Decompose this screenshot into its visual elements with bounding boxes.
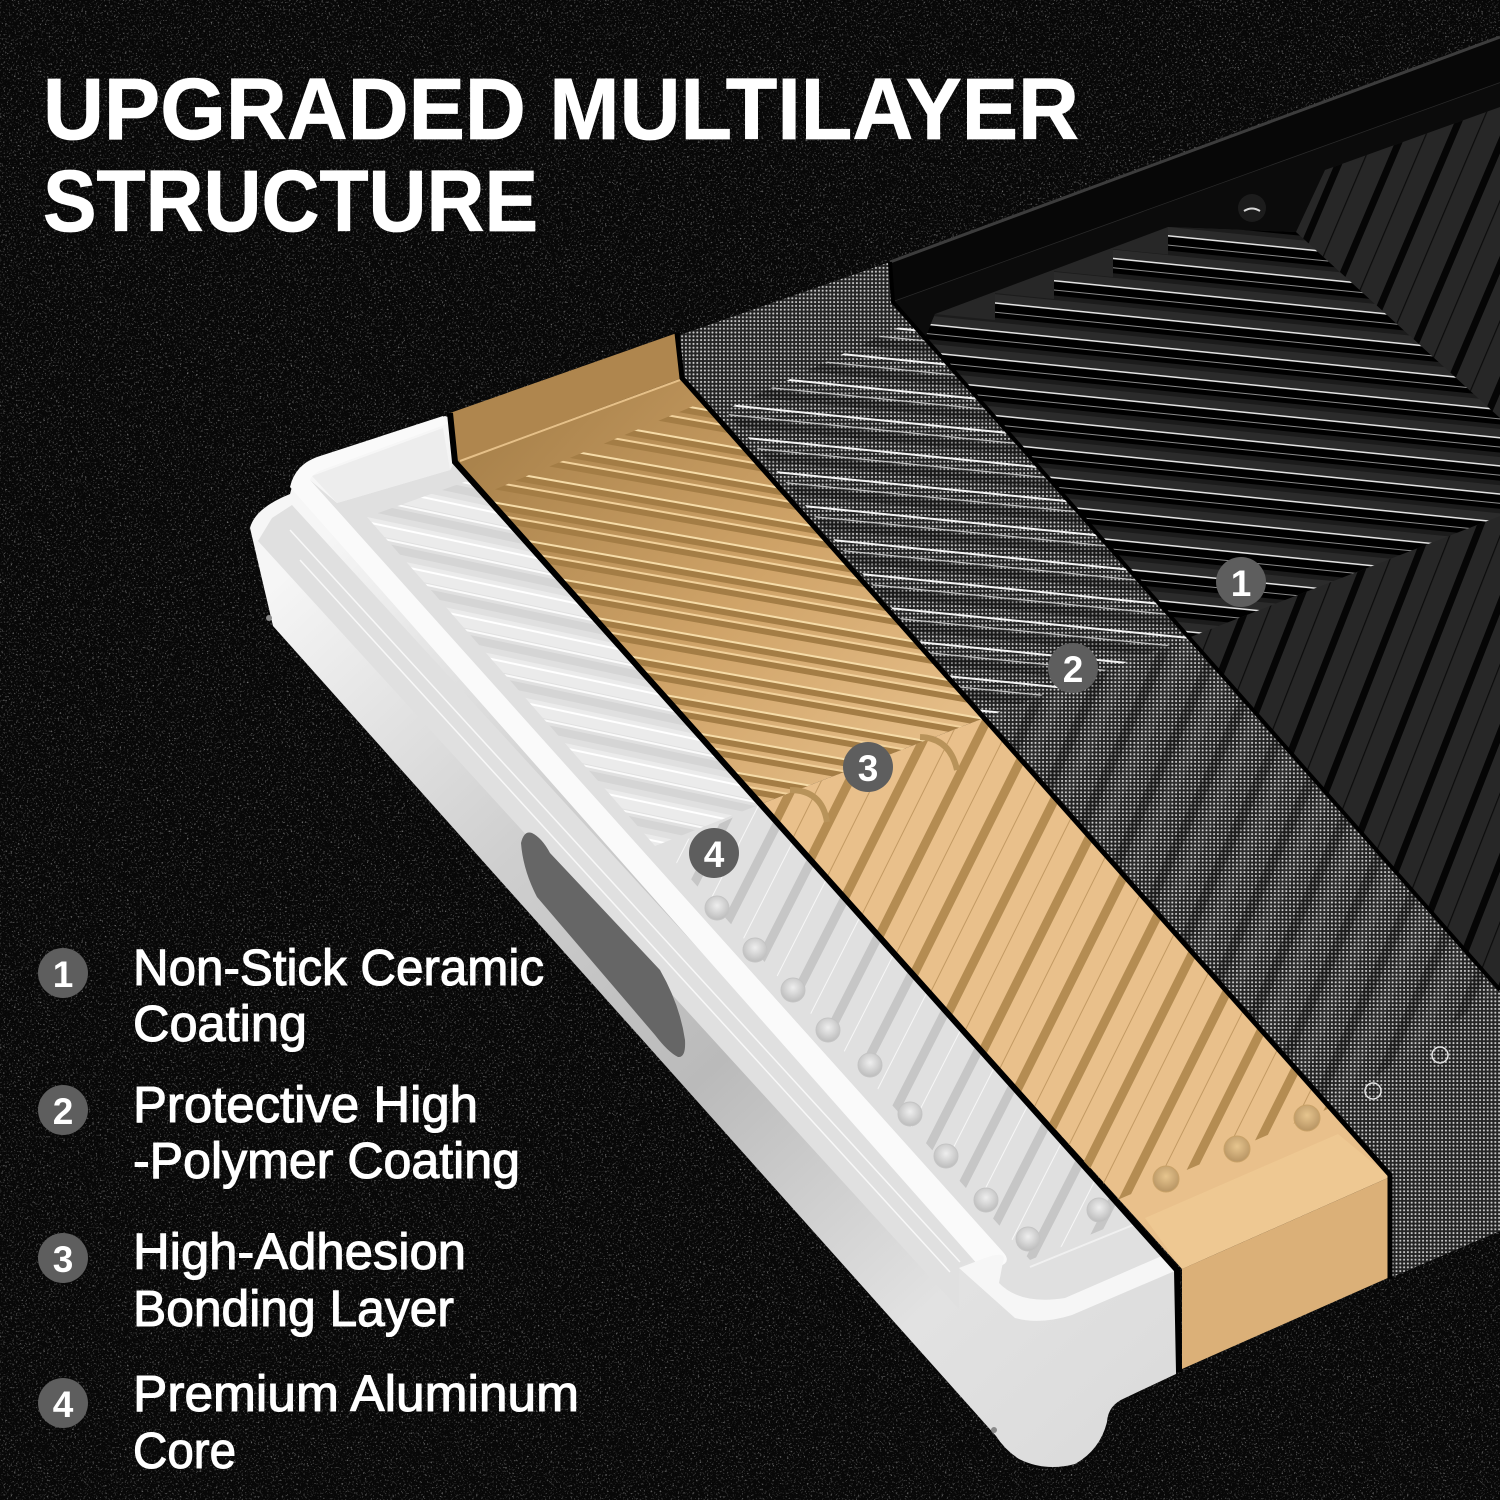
legend item 2: 2 xyxy=(53,1091,73,1132)
legend item 2: -Polymer Coating xyxy=(133,1132,520,1189)
legend item 1: Non-Stick Ceramic xyxy=(133,939,544,996)
legend item 3: 3 xyxy=(53,1239,73,1280)
black lip top highlight xyxy=(890,37,1500,262)
legend item 4: 4 xyxy=(53,1384,74,1425)
layer 4: white aluminum core xyxy=(250,416,1177,1467)
gold back lip xyxy=(450,333,682,462)
legend item 1: 1 xyxy=(53,954,73,995)
title xyxy=(43,61,1079,250)
gold lip highlight xyxy=(460,380,680,461)
legend item 4: Premium Aluminum xyxy=(133,1365,579,1422)
aluminum bottom rim xyxy=(959,1255,1177,1321)
black shallow ribs xyxy=(925,227,1500,638)
badge 3 xyxy=(843,742,893,792)
aluminum floor step line xyxy=(1030,1225,1133,1267)
legend item 3 xyxy=(38,1223,466,1337)
badge 1: 1 xyxy=(1231,563,1251,604)
black lower steep ribs xyxy=(1188,516,1500,990)
aluminum shallow ribs xyxy=(367,480,761,846)
step strip lines xyxy=(290,530,960,1272)
aluminum left rim xyxy=(290,416,1007,1266)
aluminum steep ribs xyxy=(665,804,1130,1260)
gold side face xyxy=(1182,1177,1390,1369)
legend item 3: High-Adhesion xyxy=(133,1223,466,1280)
gold rim top xyxy=(1145,1134,1390,1269)
gold rib corners xyxy=(790,737,957,822)
black back lip xyxy=(890,37,1500,302)
layer 1: black non-stick ceramic coating xyxy=(890,37,1500,990)
black floor xyxy=(893,83,1500,990)
legend item 1: Coating xyxy=(133,995,307,1052)
handle cut-out xyxy=(521,832,685,1057)
legend item 1 xyxy=(38,939,544,1052)
black upper-right steep ribs xyxy=(1296,107,1500,418)
screw dots xyxy=(266,615,997,1433)
badge 1 xyxy=(1216,557,1266,607)
layer 2: grey protective polymer coating xyxy=(680,262,1500,1278)
grey shallow ribs xyxy=(725,322,1188,718)
legend item 3: Bonding Layer xyxy=(133,1280,454,1337)
grey steep ribs xyxy=(984,638,1500,1108)
grey halftone surface xyxy=(680,262,1500,1278)
badge 3: 3 xyxy=(858,748,878,789)
gold shallow ribs xyxy=(484,402,984,804)
badge 2: 2 xyxy=(1063,649,1083,690)
aluminum step strip xyxy=(258,505,979,1309)
title: STRUCTURE xyxy=(43,153,538,250)
legend xyxy=(38,939,579,1479)
gold floor upper xyxy=(455,378,984,804)
badges on the product xyxy=(689,557,1266,878)
aluminum silhouette and side face xyxy=(250,416,1177,1467)
aluminum floor xyxy=(310,462,1164,1302)
gold floor lower xyxy=(761,718,1390,1269)
title: UPGRADED MULTILAYER xyxy=(43,61,1079,158)
legend item 4: Core xyxy=(133,1422,236,1479)
black droplet xyxy=(1238,194,1266,222)
legend item 4 xyxy=(38,1365,579,1479)
badge 4: 4 xyxy=(704,834,725,875)
aluminum droplets xyxy=(705,896,1111,1251)
gold steep ribs xyxy=(761,718,1330,1201)
black dark corner xyxy=(893,83,1500,338)
black divider lines between layers xyxy=(450,262,1500,1372)
legend item 2 xyxy=(38,1076,520,1189)
legend item 2: Protective High xyxy=(133,1076,478,1133)
layer 3: gold high-adhesion bonding layer xyxy=(450,333,1390,1369)
grey droplets xyxy=(1365,1047,1448,1099)
badge 2 xyxy=(1048,643,1098,693)
black lip lower highlight xyxy=(893,83,1500,302)
badge 4 xyxy=(689,828,739,878)
gold droplets xyxy=(1153,1105,1320,1192)
aluminum back wall xyxy=(312,428,450,503)
